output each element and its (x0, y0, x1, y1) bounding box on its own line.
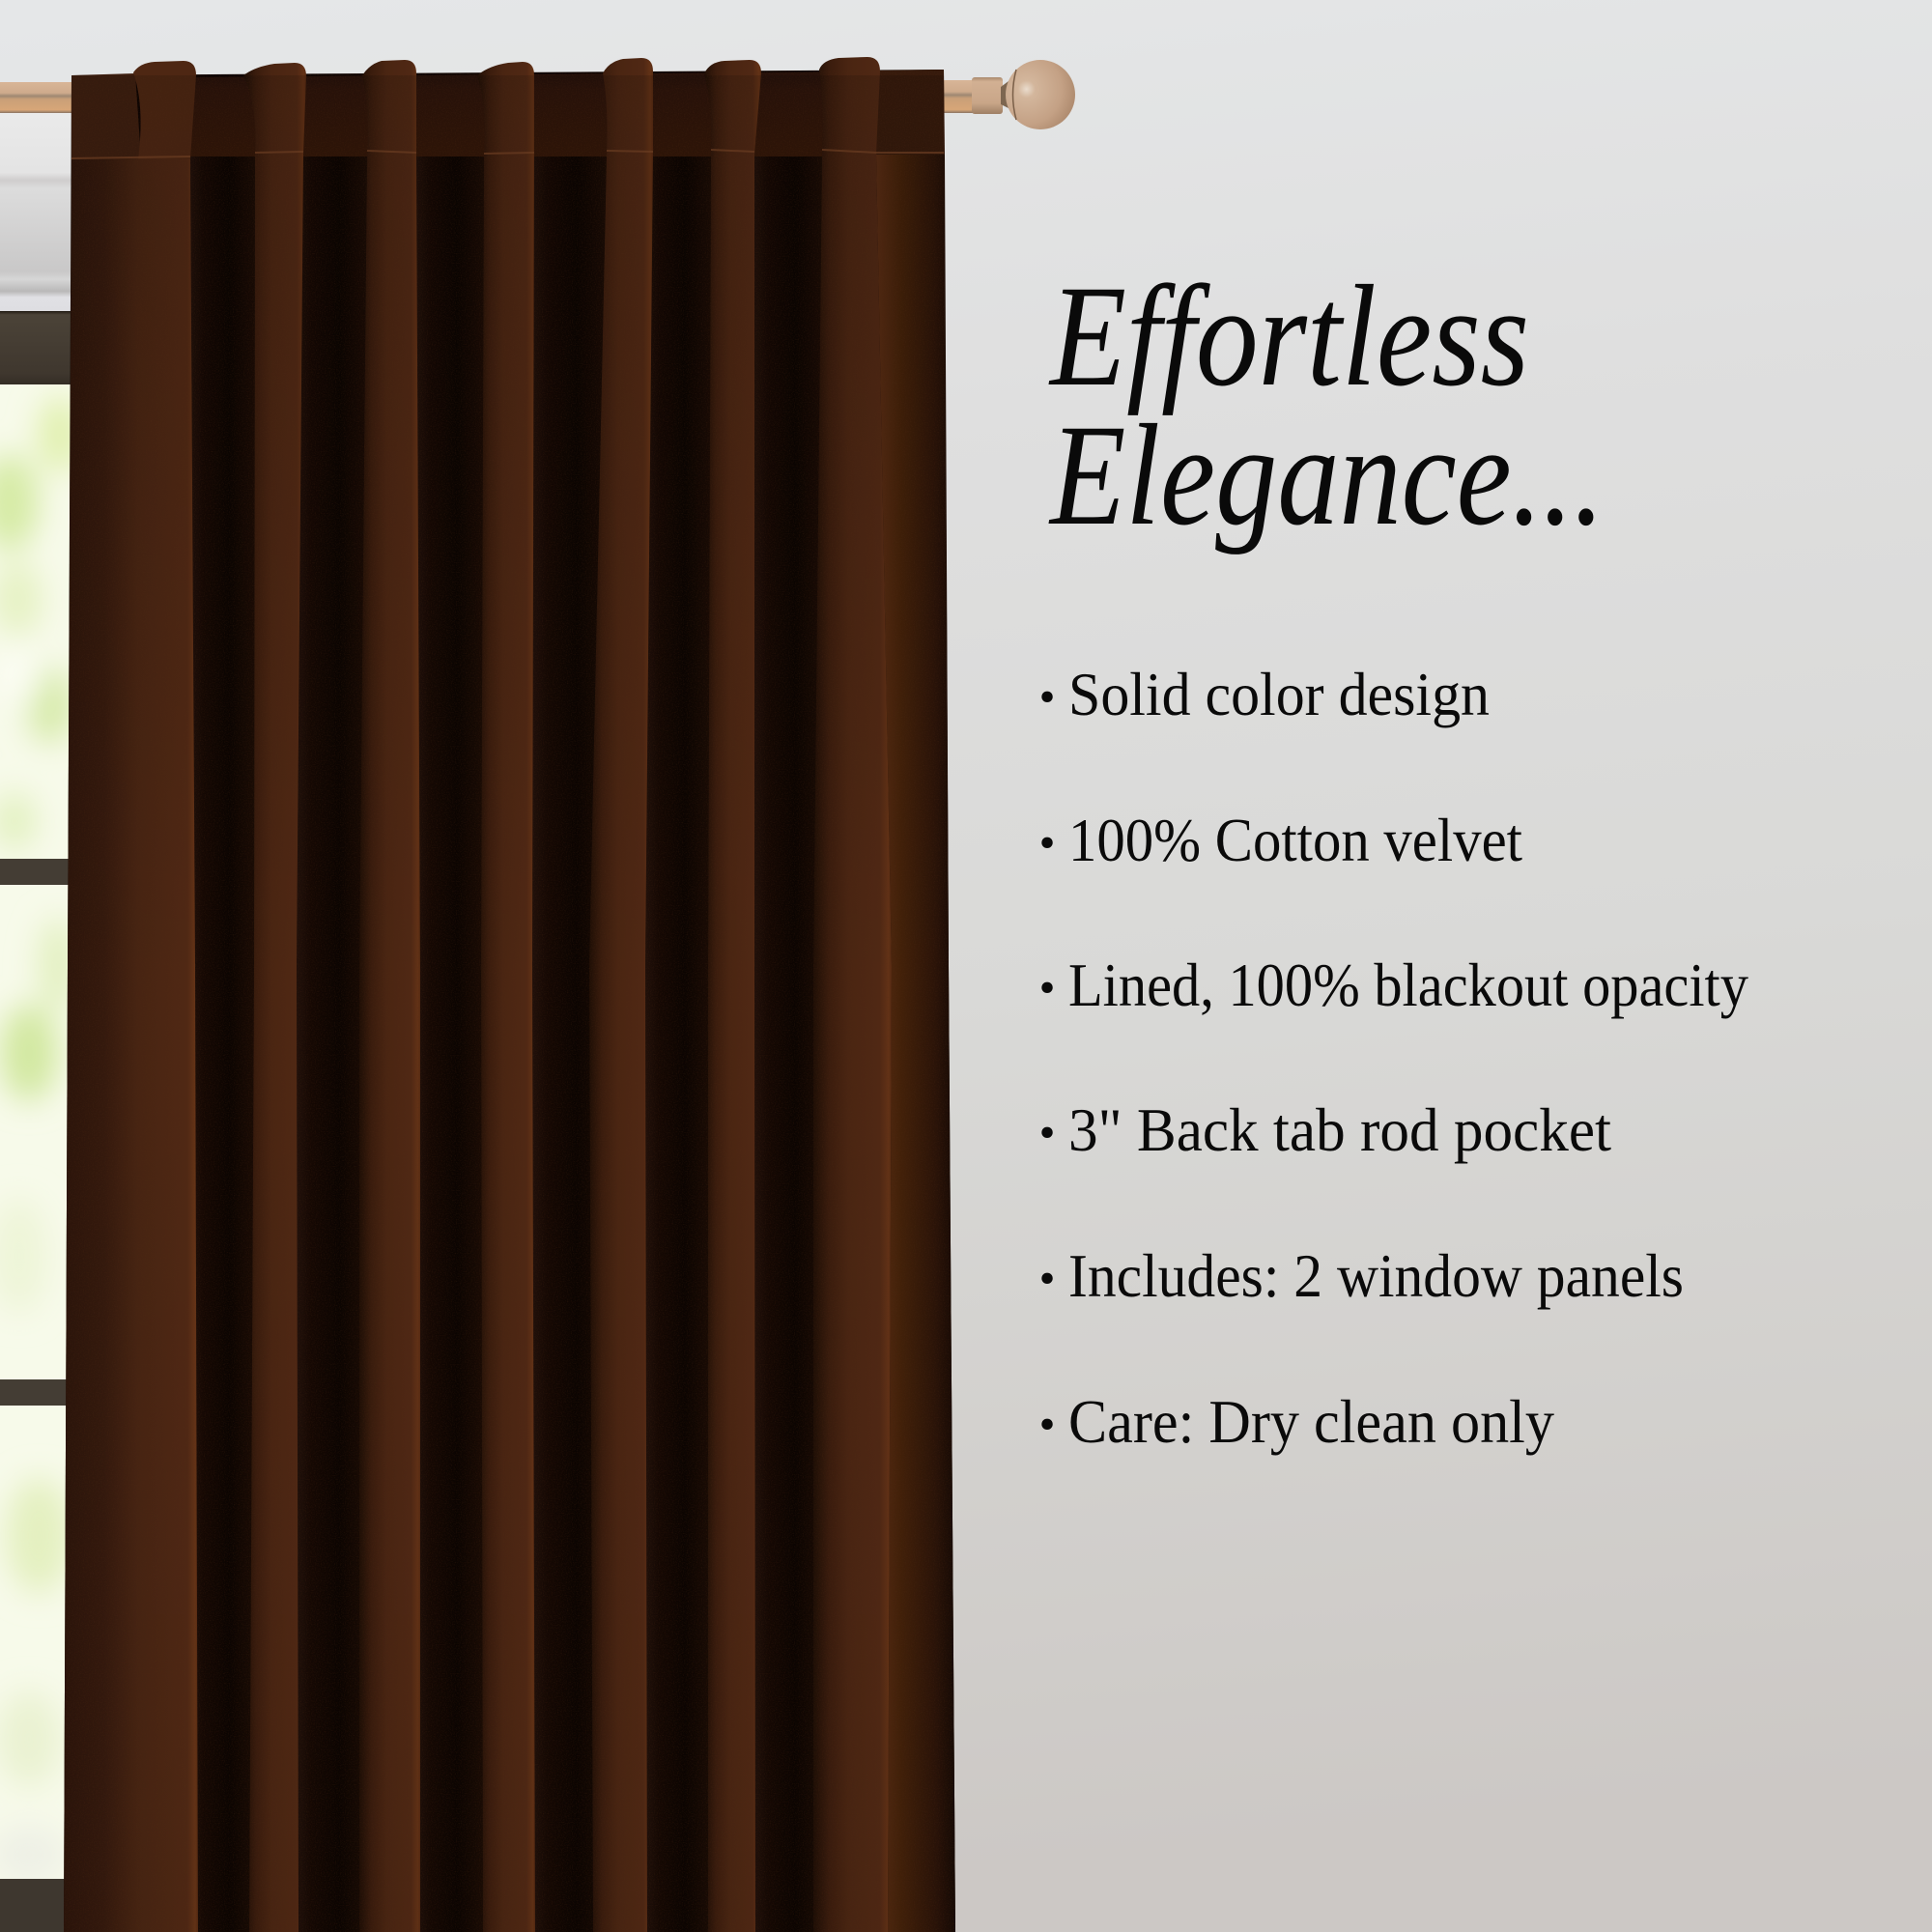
curtain panel (58, 57, 966, 1932)
bullet: cotton velvet: 100% Cotton velvet (1068, 807, 1522, 874)
curtain rod with finial (0, 60, 1075, 129)
title (1048, 256, 1605, 555)
bullet: back tab: • (1039, 1107, 1055, 1158)
bullet: care: • (1039, 1399, 1055, 1450)
bullet: blackout lining: • (1039, 962, 1055, 1013)
shaded pleat channels (190, 156, 822, 1932)
bullet: solid color: • (1039, 671, 1055, 723)
left edge panel (64, 61, 198, 1932)
bullet: blackout lining: Lined, 100% blackout opacity (1068, 952, 1748, 1019)
bullet list (1039, 661, 1748, 1456)
curtain header band (190, 71, 876, 158)
bullet: solid color: Solid color design (1068, 661, 1490, 728)
window behind curtain (0, 175, 71, 1932)
bullet: care: Care: Dry clean only (1068, 1388, 1554, 1456)
bullet: cotton velvet: • (1039, 817, 1055, 868)
title: Effortless (1048, 256, 1529, 416)
right edge panel (876, 70, 955, 1932)
bullet: back tab: 3" Back tab rod pocket (1068, 1096, 1611, 1164)
bullet: includes panels: • (1039, 1253, 1055, 1304)
bullet: includes panels: Includes: 2 window panels (1068, 1242, 1684, 1310)
back tab pleats (243, 57, 892, 1932)
title: Elegance... (1048, 395, 1605, 555)
